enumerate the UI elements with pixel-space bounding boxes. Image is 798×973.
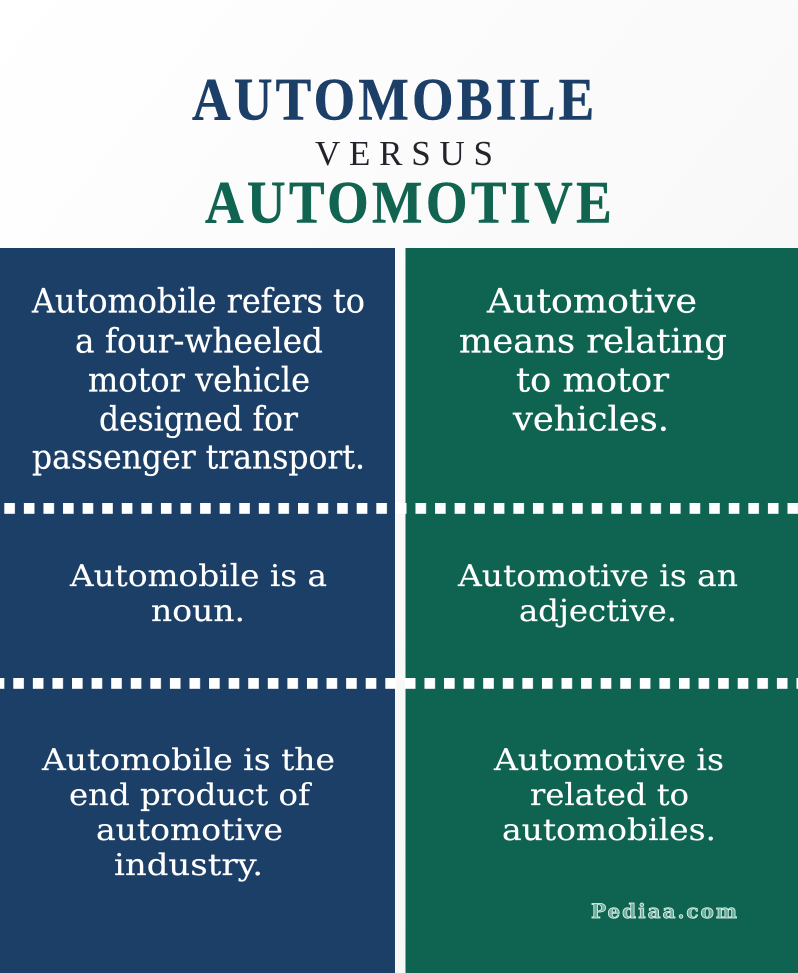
text: automobile end product bbox=[41, 743, 335, 883]
text: automobile end product: industry. bbox=[114, 848, 263, 883]
text: automotive definition: Automotive bbox=[486, 282, 697, 322]
text: automobile definition: designed for bbox=[99, 400, 299, 440]
panel: automotive column bbox=[406, 248, 798, 973]
text: automotive part of speech bbox=[457, 559, 738, 629]
text: automobile part of speech: Automobile is a bbox=[69, 559, 327, 594]
text: automobile part of speech bbox=[69, 559, 327, 629]
text: automobile end product: Automobile is the bbox=[41, 743, 335, 778]
text: automotive definition: to motor bbox=[516, 360, 670, 400]
heading: automobile: AUTOMOBILE bbox=[192, 67, 594, 133]
panel: automobile column bbox=[0, 248, 395, 973]
text: automotive relation: automobiles. bbox=[502, 813, 716, 848]
text: automotive relation: Automotive is bbox=[493, 743, 724, 778]
text: automobile part of speech: noun. bbox=[151, 594, 245, 629]
heading: automotive: AUTOMOTIVE bbox=[205, 170, 612, 236]
text: automotive definition: vehicles. bbox=[512, 400, 669, 440]
text: automotive relation bbox=[493, 743, 724, 848]
text: automobile definition bbox=[31, 282, 365, 478]
text: automobile end product: end product of bbox=[69, 778, 312, 813]
title bbox=[192, 67, 612, 236]
heading: versus: VERSUS bbox=[315, 134, 493, 173]
text: automobile definition: a four-wheeled bbox=[75, 322, 323, 362]
text: automotive part of speech: adjective. bbox=[519, 594, 677, 629]
text: automobile definition: passenger transport. bbox=[32, 438, 365, 478]
text: automotive part of speech: Automotive is an bbox=[457, 559, 738, 594]
text: automobile definition: motor vehicle bbox=[88, 360, 310, 400]
text: automotive definition bbox=[459, 282, 727, 440]
logo: Pediaa.com: Pediaa.com bbox=[591, 899, 737, 923]
text: automobile end product: automotive bbox=[96, 813, 283, 848]
text: automobile definition: Automobile refers to bbox=[31, 282, 365, 322]
text: automotive relation: related to bbox=[530, 778, 689, 813]
text: automotive definition: means relating bbox=[459, 322, 727, 362]
